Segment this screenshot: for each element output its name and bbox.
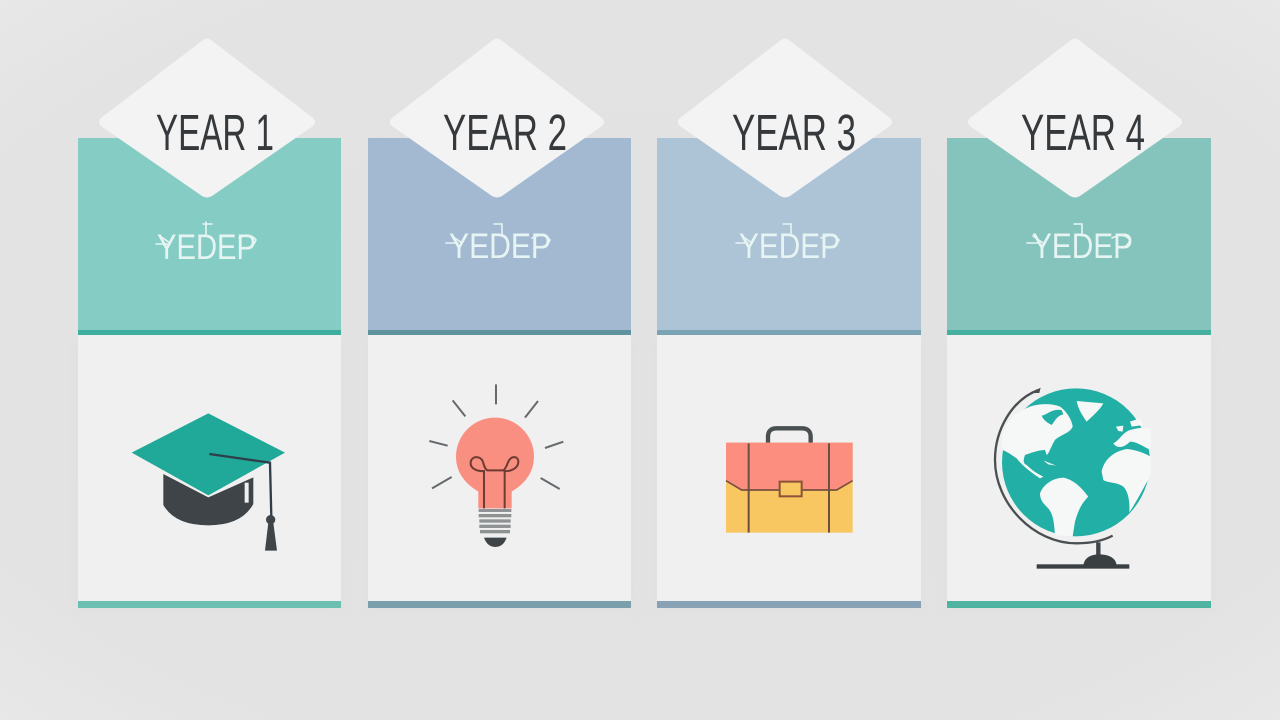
year 3 header band — [657, 138, 921, 331]
year 2 header band — [368, 138, 631, 331]
year 1 header band — [78, 138, 341, 331]
year 4 diamond tag — [968, 38, 1182, 198]
year 2 diamond tag — [390, 38, 604, 198]
year 3 diamond tag — [678, 38, 892, 198]
panel: year 2 — [364, 38, 635, 612]
panel: year 1 — [74, 38, 345, 612]
year 1 heading: YEAR 1 — [156, 104, 274, 161]
year 4 subtitle: YEDEP — [1032, 227, 1133, 266]
year 1 subtitle: YEDEP — [157, 228, 256, 267]
panel: year 4 — [943, 38, 1215, 612]
year 3 subtitle: YEDEP — [739, 227, 840, 266]
year 4 heading: YEAR 4 — [1021, 104, 1145, 161]
panel: year 3 — [653, 38, 925, 612]
year 3 heading: YEAR 3 — [732, 104, 856, 161]
icon: graduation cap — [132, 413, 285, 551]
year 2 subtitle: YEDEP — [449, 227, 551, 266]
icon: globe — [995, 388, 1151, 569]
year 4 header band — [947, 138, 1211, 331]
year 1 diamond tag — [99, 38, 315, 198]
icon: light bulb — [429, 384, 563, 547]
icon: briefcase — [726, 428, 853, 533]
year 2 heading: YEAR 2 — [443, 104, 567, 161]
